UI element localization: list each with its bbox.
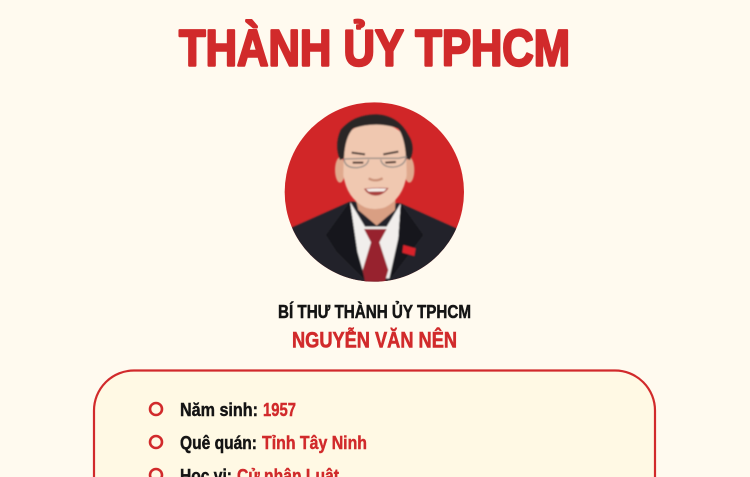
glasses: [344, 157, 407, 168]
bullet: degree: [150, 465, 339, 477]
panel: biography: [94, 370, 655, 477]
shirt: [350, 202, 401, 278]
bullet: hometown: Tỉnh Tây Ninh: [262, 432, 367, 453]
hair: [337, 114, 413, 160]
nose: [369, 178, 383, 180]
face: [343, 123, 407, 209]
suit: [292, 200, 456, 282]
neck: [355, 200, 397, 226]
bullet: birth year: [150, 399, 296, 420]
ears: [335, 157, 345, 183]
tie: [363, 229, 388, 282]
bullet: hometown: [150, 432, 367, 453]
title: THÀNH ỦY TPHCM: [179, 18, 570, 76]
lapel pin: [402, 245, 416, 256]
eyes: [352, 160, 397, 164]
bullet: birth year: 1957: [263, 399, 296, 420]
brows: [352, 152, 398, 154]
subtitle: name: NGUYỄN VĂN NÊN: [292, 326, 457, 352]
portrait: [283, 102, 467, 285]
lapel shadow: [327, 202, 363, 277]
mouth: [364, 188, 389, 196]
subtitle: position: BÍ THƯ THÀNH ỦY TPHCM: [278, 301, 471, 322]
bullet: hometown: Quê quán:: [180, 432, 257, 453]
bullet: birth year: Năm sinh:: [180, 399, 258, 420]
